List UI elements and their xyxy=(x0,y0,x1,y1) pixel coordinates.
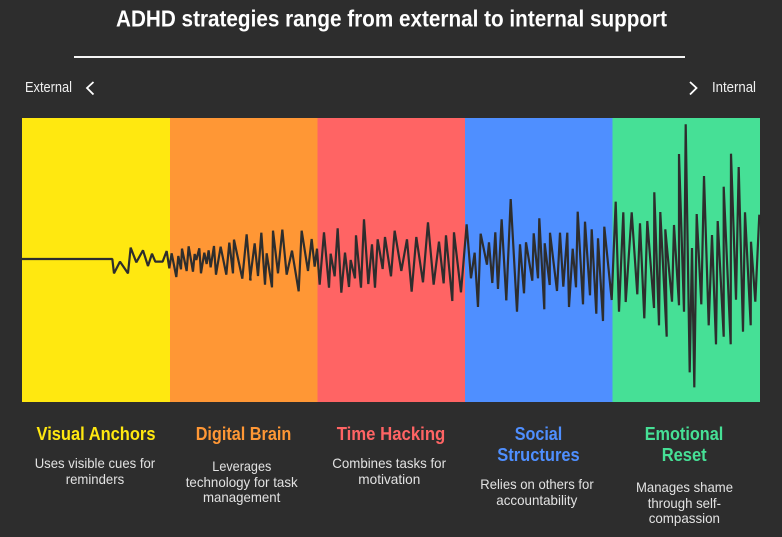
axis label: internal xyxy=(690,79,756,96)
column: Emotional Reset: through self- xyxy=(648,495,721,511)
column: Social Structures: accountability xyxy=(496,492,577,508)
column: Emotional Reset: Reset xyxy=(662,445,707,465)
column: Digital Brain: management xyxy=(203,489,280,505)
column: Visual Anchors xyxy=(35,424,156,487)
column: Digital Brain: Leverages xyxy=(212,458,271,474)
colour bands xyxy=(22,118,760,402)
column: Emotional Reset: Manages shame xyxy=(636,479,733,495)
column: Time Hacking: Time Hacking xyxy=(337,424,445,444)
column: Visual Anchors: Visual Anchors xyxy=(36,424,156,444)
title: ADHD strategies range from external to internal support xyxy=(116,6,667,32)
column: Visual Anchors: Uses visible cues for xyxy=(35,455,156,471)
column: Time Hacking xyxy=(332,424,446,487)
column: Social Structures: Relies on others for xyxy=(480,476,594,492)
column: Social Structures: Structures xyxy=(497,445,580,465)
column: Digital Brain xyxy=(186,424,299,505)
axis label: external: External xyxy=(25,79,72,96)
column: Time Hacking: motivation xyxy=(358,471,420,487)
column: Digital Brain: technology for task xyxy=(186,474,299,490)
column: Time Hacking: Combines tasks for xyxy=(332,455,446,471)
column: Digital Brain: Digital Brain xyxy=(196,424,291,444)
waveform xyxy=(22,124,759,387)
column: Social Structures: Social xyxy=(515,424,562,444)
column: Emotional Reset: compassion xyxy=(649,510,720,526)
column: Visual Anchors: reminders xyxy=(66,471,124,487)
column: Social Structures xyxy=(480,424,594,508)
column: Emotional Reset: Emotional xyxy=(645,424,723,444)
axis label: internal: Internal xyxy=(712,79,756,96)
column: Emotional Reset xyxy=(636,424,733,526)
